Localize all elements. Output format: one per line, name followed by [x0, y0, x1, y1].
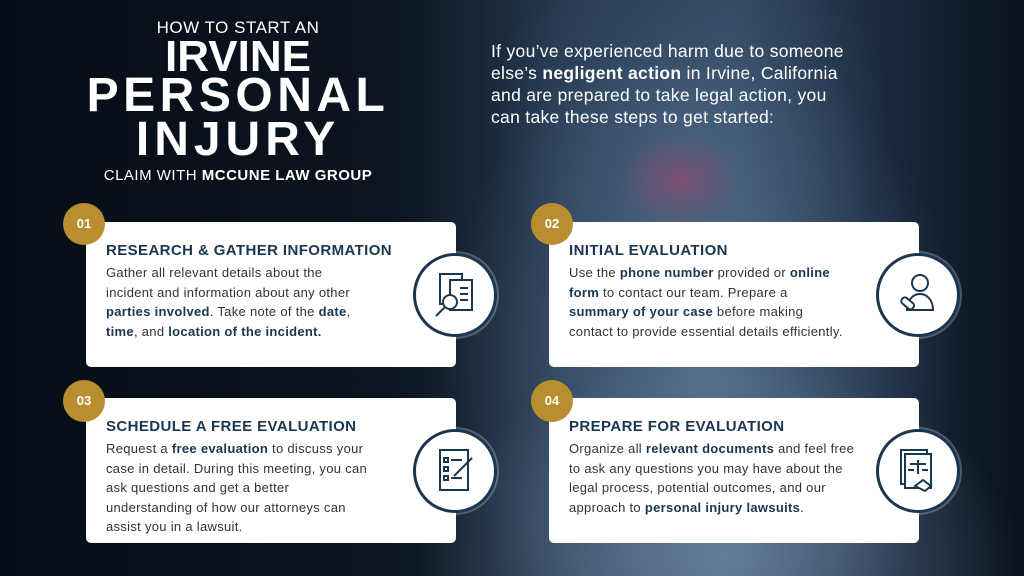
title [87, 18, 389, 184]
panel: step 1: RESEARCH & GATHER INFORMATION [106, 242, 392, 259]
panel: step 4: legal process, potential outcomes, and our [569, 480, 826, 495]
intro text: else’s negligent action in Irvine, California [491, 63, 838, 83]
panel: step 1 [86, 222, 456, 367]
panel: step 2: contact to provide essential details efficiently. [569, 324, 843, 338]
badge 04: 04 [545, 393, 559, 408]
icon: legal documents handshake [876, 429, 960, 513]
panel: step 1: incident and information about any other [106, 284, 350, 300]
intro text: can take these steps to get started: [491, 107, 774, 127]
panel: step 2: form to contact our team. Prepare a [569, 284, 788, 300]
badge 03: 03 [77, 393, 91, 408]
panel: step 3: case in detail. During this meeting, you can [106, 460, 367, 476]
panel: step 2: summary of your case before making [569, 304, 803, 319]
panel: step 3: understanding of how our attorneys can [106, 500, 346, 514]
title: CLAIM WITH MCCUNE LAW GROUP [104, 167, 372, 184]
panel: step 1: time, and location of the incident. [106, 324, 322, 338]
icon: documents magnifier [413, 253, 497, 337]
intro text: and are prepared to take legal action, you [491, 85, 827, 105]
panel: step 4: Organize all relevant documents and feel free [569, 441, 854, 456]
panel: step 1: parties involved. Take note of the date, [106, 304, 350, 319]
panel: step 3: SCHEDULE A FREE EVALUATION [106, 418, 356, 435]
panel: step 4: approach to personal injury lawsuits. [569, 500, 804, 514]
title: HOW TO START AN [157, 18, 319, 37]
badge 04 [531, 380, 573, 422]
panel: step 2: Use the phone number provided or online [569, 265, 830, 280]
icon: checklist [413, 429, 497, 513]
badge 02 [531, 203, 573, 245]
title: PERSONAL [87, 69, 389, 122]
title: IRVINE [165, 32, 311, 81]
title: INJURY [136, 113, 340, 166]
badge 01: 01 [77, 216, 91, 231]
panel: step 3: ask questions and get a better [106, 480, 289, 495]
badge 01 [63, 203, 105, 245]
intro text [491, 41, 844, 127]
badge 02: 02 [545, 216, 559, 231]
panel: step 3 [86, 398, 456, 543]
panel: step 3: Request a free evaluation to discuss your [106, 441, 363, 456]
intro text: If you’ve experienced harm due to someone [491, 41, 844, 61]
panel: step 2: INITIAL EVALUATION [569, 242, 728, 259]
icon: person phone [876, 253, 960, 337]
panel: step 4: PREPARE FOR EVALUATION [569, 418, 784, 435]
panel: step 2 [549, 222, 919, 367]
panel: step 3: assist you in a lawsuit. [106, 519, 243, 534]
panel: step 4 [549, 398, 919, 543]
panel: step 1: Gather all relevant details about the [106, 265, 322, 280]
panel: step 4: to ask any questions you may have about the [569, 460, 843, 476]
badge 03 [63, 380, 105, 422]
